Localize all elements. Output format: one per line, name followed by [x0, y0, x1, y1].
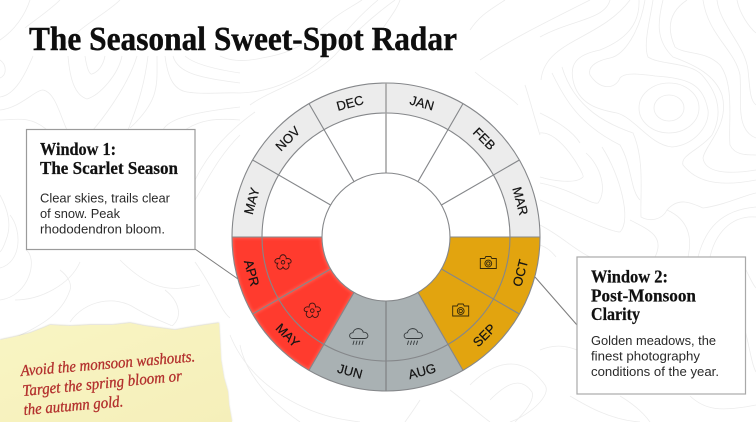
- segments: monsoon grey: [309, 292, 463, 391]
- heading: window 2: Clarity: [591, 304, 640, 324]
- month labels: AUG: [406, 360, 438, 382]
- centre hub: [322, 173, 450, 301]
- heading: window 2: Window 2:: [591, 266, 668, 286]
- panel: window 2 callout: [577, 257, 746, 394]
- text: handwritten note: [19, 348, 196, 419]
- text: window 2 description: finest photography: [591, 348, 701, 364]
- month labels: JAN: [408, 93, 436, 113]
- text: window 1 description: [40, 190, 171, 236]
- icon: rain cloud june: [350, 329, 368, 344]
- icon: rain cloud august: [404, 329, 422, 344]
- icon: camera september: [453, 304, 469, 316]
- heading: window 2: Post-Monsoon: [591, 286, 696, 306]
- month labels: JUN: [336, 361, 364, 382]
- segments: autumn gold: [418, 237, 540, 370]
- ring outlines and spokes: [232, 83, 540, 391]
- heading: window 1: Window 1:: [40, 139, 116, 159]
- month labels: MAY: [241, 186, 263, 216]
- text: window 1 description: rhododendron bloom.: [40, 222, 165, 236]
- text: window 1 description: of snow. Peak: [40, 206, 120, 221]
- month labels: OCT: [510, 258, 531, 288]
- icon: flower april: [275, 255, 291, 269]
- month labels: [241, 92, 531, 382]
- month labels: MAR: [509, 185, 531, 217]
- segments: may red: [253, 269, 354, 370]
- heading: window 1: The Scarlet Season: [40, 158, 178, 178]
- month labels: MAY: [273, 320, 303, 350]
- text: window 2 description: Golden meadows, the: [591, 333, 716, 348]
- leader line: window 1: [195, 249, 238, 279]
- outer month ring: [232, 83, 540, 391]
- heading: window 2: [591, 266, 696, 324]
- callout: torn paper note: [0, 323, 232, 422]
- text: window 1 description: Clear skies, trails clear: [40, 190, 171, 206]
- text: handwritten note: Avoid the monsoon washouts.: [19, 348, 196, 380]
- heading: window 1: [40, 139, 178, 178]
- month labels: NOV: [272, 123, 303, 154]
- month labels: SEP: [470, 321, 499, 350]
- text: window 2 description: conditions of the year.: [591, 364, 719, 379]
- inner empty band: [262, 113, 510, 361]
- month labels: FEB: [470, 124, 499, 153]
- text: window 2 description: [591, 333, 719, 379]
- leader line: window 2: [535, 277, 577, 325]
- text: handwritten note: the autumn gold.: [23, 393, 124, 419]
- month labels: DEC: [335, 92, 365, 114]
- segments: april red: [232, 237, 331, 314]
- icon: flower may: [304, 303, 320, 317]
- month labels: APR: [241, 258, 262, 288]
- icon: camera october: [480, 256, 496, 268]
- title: The Seasonal Sweet-Spot Radar: [29, 21, 457, 58]
- text: handwritten note: Target the spring bloom or: [22, 368, 183, 400]
- radar wheel: [232, 83, 540, 391]
- panel: window 1 callout: [26, 130, 195, 250]
